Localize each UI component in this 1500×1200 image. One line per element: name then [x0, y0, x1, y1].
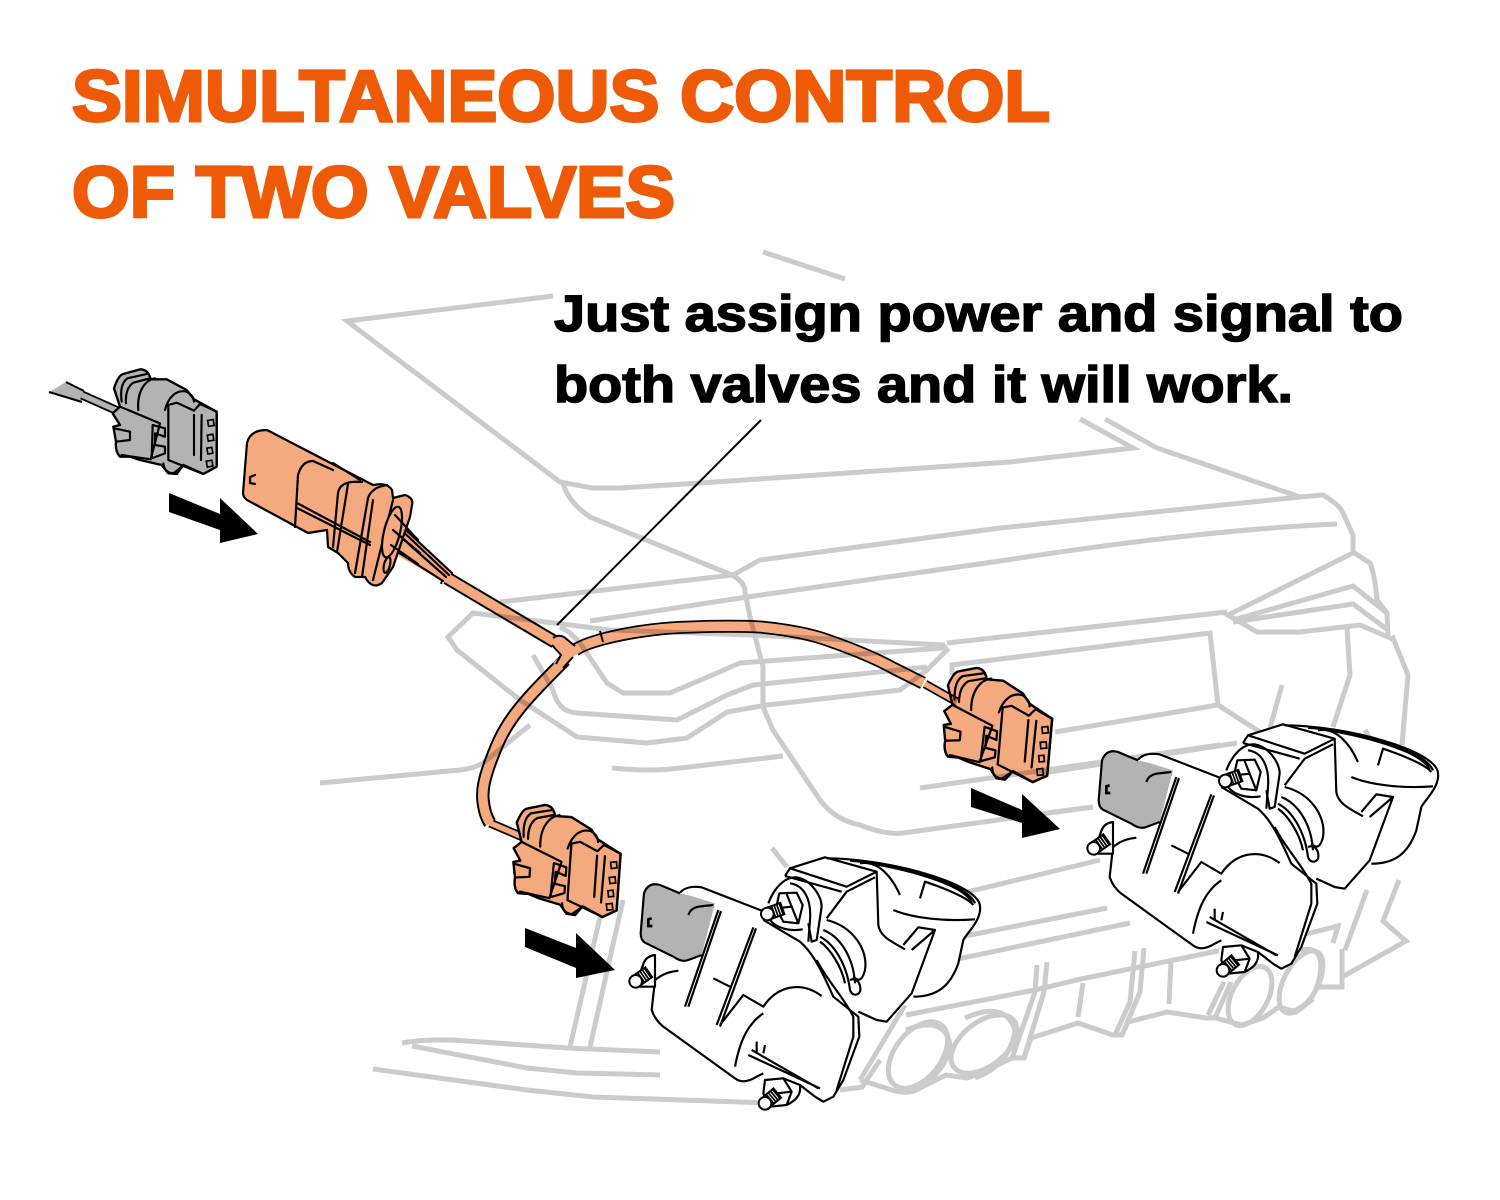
harness branch to lower connector [483, 660, 565, 823]
title: OF TWO VALVES [72, 153, 675, 233]
wiring harness [441, 572, 957, 838]
loom wires over plug hole [391, 515, 420, 564]
car outline background [320, 252, 1408, 1103]
orange Y-harness main plug [243, 430, 412, 585]
harness thin leads [490, 684, 957, 838]
harness fill [447, 578, 923, 823]
harness main trunk [447, 578, 555, 642]
valve: upper right [1085, 724, 1439, 979]
callout leader line [557, 420, 761, 625]
harness branch to upper connector [575, 626, 923, 683]
arrow: to upper valve [971, 788, 1060, 838]
valve: lower [627, 857, 981, 1112]
callout text: both valves and it will work. [554, 356, 1293, 413]
callout text: Just assign power and signal to [554, 285, 1403, 342]
loom wires from plug [388, 518, 452, 582]
gray source connector [113, 369, 217, 474]
gray source cable [49, 382, 120, 412]
arrow: to plug [169, 493, 258, 543]
orange connector: lower [509, 803, 624, 918]
arrow: to lower valve [525, 928, 615, 978]
title [72, 57, 1050, 233]
harness Y junction [552, 636, 590, 668]
callout text [554, 285, 1403, 413]
orange connector: upper [939, 665, 1056, 783]
title: SIMULTANEOUS CONTROL [72, 57, 1050, 137]
